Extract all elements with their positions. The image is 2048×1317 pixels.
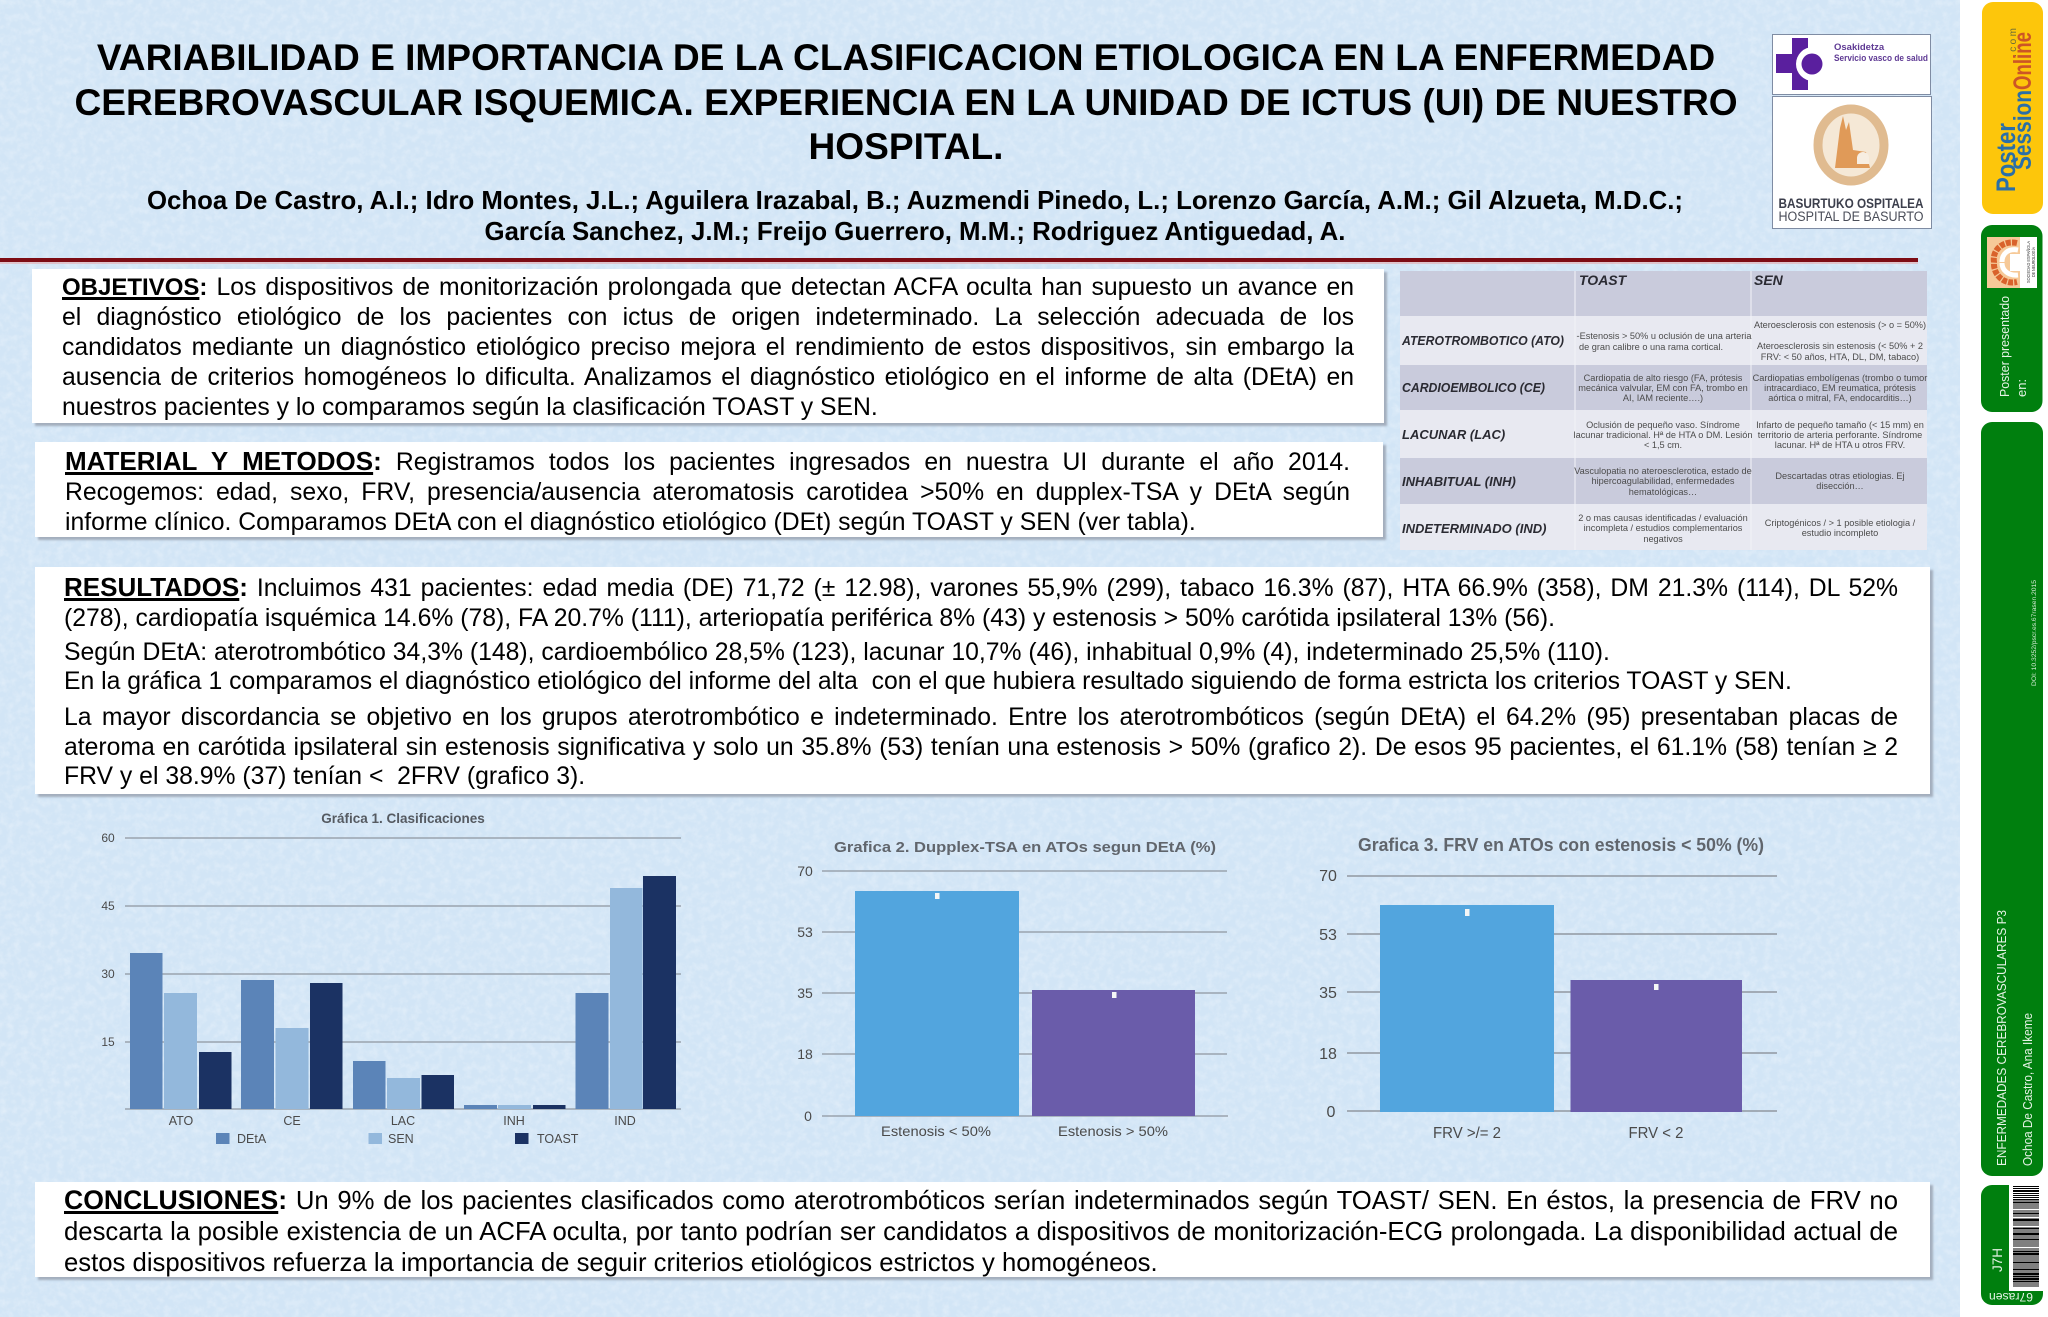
comparison table: TOAST and SEN: FRV: < 50 años, HTA, DL, DM, tabaco) xyxy=(1761,352,1919,362)
comparison table: TOAST and SEN: Cardiopatia de alto riesgo (FA, prótesis xyxy=(1584,373,1743,383)
title: HOSPITAL. xyxy=(808,125,1004,167)
logo: Osakidetza: Osakidetza xyxy=(1834,42,1885,53)
comparison table: TOAST and SEN: lacunar. Hª de HTA u otros FRV. xyxy=(1775,440,1905,450)
chart 1 legend xyxy=(216,1132,579,1146)
sidebar: session box: ENFERMEDADES CEREBROVASCULARES P3 xyxy=(1995,910,2009,1166)
comparison table: TOAST and SEN: intracardiaco, EM reumatica, prótesis xyxy=(1764,383,1916,393)
objetivos text: ausencia de criterios homogéneos lo dificulta. Analizamos el diagnóstico etiológico en el informe de alta (DEtA) en xyxy=(62,364,1354,391)
chart 3 title: Grafica 3. FRV en ATOs con estenosis < 50% (%) xyxy=(1358,834,1764,855)
chart 3: FRV: 35 xyxy=(1319,985,1337,1002)
comparison table: TOAST and SEN: INHABITUAL (INH) xyxy=(1402,474,1516,489)
comparison table: TOAST and SEN xyxy=(1400,271,1927,550)
chart 1 legend: TOAST xyxy=(537,1132,579,1146)
conclusiones text: estos dispositivos refuerza la importancia de seguir criterios etiológicos estrictos y homogéneos. xyxy=(64,1249,1158,1277)
sidebar: barcode box: J7H xyxy=(1990,1248,2005,1272)
comparison table: TOAST and SEN: incompleta / estudios complementarios xyxy=(1584,523,1743,533)
comparison table: TOAST and SEN: territorio de arteria perforante. Síndrome xyxy=(1758,430,1922,440)
resultados paragraph 3: La mayor discordancia se objetivo en los grupos aterotrombótico e indeterminado. Entre los aterotrombóticos (según DEtA) el 64.2% (95) presentaban placas de xyxy=(64,704,1898,731)
chart 1: clasificaciones: 60 xyxy=(101,831,115,845)
chart 2: duplex TSA: 53 xyxy=(797,924,813,940)
comparison table: TOAST and SEN: ATEROTROMBOTICO (ATO) xyxy=(1401,333,1564,348)
comparison table: TOAST and SEN: AI, IAM reciente….) xyxy=(1623,393,1703,403)
chart 2: duplex TSA: 18 xyxy=(797,1046,813,1062)
panel: resultados xyxy=(35,567,1930,794)
resultados paragraph 2: Según DEtA: aterotrombótico 34,3% (148), cardioembólico 28,5% (123), lacunar 10,7% (46), inhabitual 0,9% (4), indeterminado 25,5% (110). xyxy=(64,639,1610,666)
resultados paragraph 3: ateroma en carótida ipsilateral sin estenosis significativa y solo un 35.8% (53) tenían una estenosis > 50% (grafico 2). De esos 95 pacientes, el 61.1% (58) tenían ≥ 2 xyxy=(64,734,1898,760)
chart 1 legend: SEN xyxy=(388,1132,414,1146)
chart 3: FRV xyxy=(1319,834,1777,1142)
sidebar: congress box xyxy=(1981,225,2042,412)
chart 3: FRV: 0 xyxy=(1327,1104,1336,1121)
sidebar: session box: DOI: 10.3252/pscr.es.67rasen.2015 xyxy=(2031,580,2038,686)
chart 1: clasificaciones: 30 xyxy=(101,967,115,981)
objetivos text xyxy=(62,274,1354,421)
objetivos text: OBJETIVOS: Los dispositivos de monitorización prolongada que detectan ACFA oculta han supuesto un avance en xyxy=(62,274,1354,301)
resultados paragraph 1: (278), cardiopatía isquémica 14.6% (78), FA 20.7% (111), arteriopatía periférica 8% (43) y estenosis > 50% carótida ipsilateral 13% (56). xyxy=(64,605,1555,632)
material y metodos text xyxy=(65,446,1350,536)
comparison table: TOAST and SEN: Cardiopatias embolígenas (trombo o tumor xyxy=(1753,373,1927,383)
icon: neurology society logo: SOCIEDAD ESPAÑOLA xyxy=(2025,240,2031,283)
sidebar: Poster Session Online logo: Poster xyxy=(1991,123,2021,192)
sidebar: session box xyxy=(1981,422,2043,1176)
chart 1: clasificaciones: ATO xyxy=(169,1114,194,1128)
chart 1: clasificaciones: IND xyxy=(614,1114,636,1128)
sidebar: congress box: en: xyxy=(2014,379,2029,397)
comparison table: TOAST and SEN: -Estenosis > 50% u oclusión de una arteria xyxy=(1577,331,1752,341)
comparison table: TOAST and SEN: SEN xyxy=(1754,272,1784,288)
chart 3: FRV: 18 xyxy=(1319,1046,1337,1063)
sidebar: barcode box: 67rasen xyxy=(1989,1290,2033,1302)
comparison table: TOAST and SEN: Ateroesclerosis sin estenosis (< 50% + 2 xyxy=(1757,341,1923,351)
panel: conclusiones xyxy=(35,1182,1930,1277)
chart 1: clasificaciones: CE xyxy=(283,1114,301,1128)
comparison table: TOAST and SEN: INDETERMINADO (IND) xyxy=(1402,521,1546,536)
comparison table: TOAST and SEN: CARDIOEMBOLICO (CE) xyxy=(1402,380,1545,395)
sidebar: Poster Session Online logo xyxy=(1982,2,2043,214)
logo: Osakidetza: Servicio vasco de salud xyxy=(1834,53,1928,63)
comparison table: TOAST and SEN: Oclusión de pequeño vaso. Síndrome xyxy=(1586,420,1740,430)
objetivos text: nuestros pacientes y lo comparamos según la clasificación TOAST y SEN. xyxy=(62,394,878,421)
chart 3: FRV: 53 xyxy=(1319,927,1337,944)
comparison table: TOAST and SEN: hipercoagulabilidad, enfermedades xyxy=(1591,476,1735,486)
chart 2: duplex TSA: 35 xyxy=(797,985,813,1001)
icon: neurology society logo xyxy=(1987,237,2037,288)
sidebar: session box: Ochoa De Castro, Ana Ikeme xyxy=(2021,1013,2035,1166)
comparison table: TOAST and SEN: disección… xyxy=(1816,481,1864,491)
resultados paragraph 1: RESULTADOS: Incluimos 431 pacientes: edad media (DE) 71,72 (± 12.98), varones 55,9% (299), tabaco 16.3% (87), HTA 66.9% (358), DM 21.3% (114), DL 52% xyxy=(64,572,1898,602)
chart 1: clasificaciones: LAC xyxy=(391,1114,415,1128)
comparison table: TOAST and SEN: hematológicas… xyxy=(1629,487,1697,497)
comparison table: TOAST and SEN: Infarto de pequeño tamaño (< 15 mm) en xyxy=(1756,420,1924,430)
authors xyxy=(147,187,1683,246)
chart 1: clasificaciones: 15 xyxy=(101,1035,115,1049)
panel: material y metodos xyxy=(35,442,1383,537)
material y metodos text: informe clínico. Comparamos DEtA con el diagnóstico etiológico (DEt) según TOAST y SEN (ver tabla). xyxy=(65,509,1196,536)
sidebar: Poster Session Online logo: Session xyxy=(2009,90,2037,170)
sidebar: Poster Session Online logo: .com xyxy=(2008,28,2019,57)
comparison table: TOAST and SEN: LACUNAR (LAC) xyxy=(1402,427,1505,442)
title: CEREBROVASCULAR ISQUEMICA. EXPERIENCIA EN LA UNIDAD DE ICTUS (UI) DE NUESTRO xyxy=(74,81,1738,123)
comparison table: TOAST and SEN: TOAST xyxy=(1579,272,1628,288)
chart 2: duplex TSA: Estenosis > 50% xyxy=(1058,1123,1168,1139)
resultados paragraph 2: En la gráfica 1 comparamos el diagnóstico etiológico del informe del alta con el que hubiera resultado siguiendo de forma estricta los criterios TOAST y SEN. xyxy=(64,668,1792,695)
resultados paragraph 2 xyxy=(64,639,1792,695)
chart 2: duplex TSA: 0 xyxy=(804,1108,812,1124)
conclusiones text: descarta la posible existencia de un ACFA oculta, por tanto podrían ser candidatos a dispositivos de monitorización-ECG prolongada. La disponibilidad actual de xyxy=(64,1218,1898,1246)
conclusiones text xyxy=(64,1185,1898,1277)
chart 3: FRV: FRV >/= 2 xyxy=(1433,1125,1501,1142)
chart 1 legend: DEtA xyxy=(237,1132,267,1146)
resultados paragraph 3: FRV y el 38.9% (37) tenían < 2FRV (grafico 3). xyxy=(64,763,585,790)
title: VARIABILIDAD E IMPORTANCIA DE LA CLASIFICACION ETIOLOGICA EN LA ENFERMEDAD xyxy=(97,36,1715,78)
resultados paragraph 3 xyxy=(64,704,1898,790)
comparison table: TOAST and SEN: mecánica valvular, EM con FA, trombo en xyxy=(1578,383,1748,393)
comparison table: TOAST and SEN: 2 o mas causas identificadas / evaluación xyxy=(1578,513,1748,523)
comparison table: TOAST and SEN: Vasculopatia no ateroesclerotica, estado de xyxy=(1574,466,1752,476)
comparison table: TOAST and SEN: estudio incompleto xyxy=(1802,528,1878,538)
material y metodos text: MATERIAL Y METODOS: Registramos todos los pacientes ingresados en nuestra UI durante el año 2014. xyxy=(65,446,1350,476)
logo: Hospital de Basurto xyxy=(1772,96,1932,228)
sidebar: congress box: Poster presentado xyxy=(1997,296,2012,397)
conclusiones text: CONCLUSIONES: Un 9% de los pacientes clasificados como aterotrombóticos serían indeterminados según TOAST/ SEN. En éstos, la presencia de FRV no xyxy=(64,1185,1898,1215)
objetivos text: el diagnóstico etiológico de los pacientes con ictus de origen indeterminado. La selección adecuada de los xyxy=(62,304,1354,331)
comparison table: TOAST and SEN: Ateroesclerosis con estenosis (> o = 50%) xyxy=(1754,320,1926,330)
authors: García Sanchez, J.M.; Freijo Guerrero, M.M.; Rodriguez Antiguedad, A. xyxy=(484,218,1345,246)
comparison table: TOAST and SEN: aórtica o mitral, FA, endocarditis…) xyxy=(1768,393,1912,403)
sidebar: barcode box xyxy=(1981,1185,2043,1305)
comparison table: TOAST and SEN: Criptogénicos / > 1 posible etiologia / xyxy=(1765,518,1916,528)
chart 1: clasificaciones: 45 xyxy=(101,899,115,913)
chart 2: duplex TSA: 70 xyxy=(797,863,813,879)
chart 3: FRV: FRV < 2 xyxy=(1628,1125,1684,1142)
chart 2: duplex TSA xyxy=(797,839,1228,1139)
chart 1: clasificaciones xyxy=(101,811,681,1146)
comparison table: TOAST and SEN: negativos xyxy=(1643,534,1683,544)
sidebar: Poster Session Online logo: Online xyxy=(2009,32,2037,90)
logo: Hospital de Basurto: HOSPITAL DE BASURTO xyxy=(1778,209,1924,224)
chart 2: duplex TSA: Estenosis < 50% xyxy=(881,1123,991,1139)
logo: Hospital de Basurto: BASURTUKO OSPITALEA xyxy=(1778,196,1924,211)
authors: Ochoa De Castro, A.I.; Idro Montes, J.L.; Aguilera Irazabal, B.; Auzmendi Pinedo, L.; Lorenzo García, A.M.; Gil Alzueta, M.D.C.; xyxy=(147,187,1683,215)
title xyxy=(74,36,1738,167)
comparison table: TOAST and SEN: de gran calibre o una rama cortical. xyxy=(1579,342,1723,352)
material y metodos text: Recogemos: edad, sexo, FRV, presencia/ausencia ateromatosis carotidea >50% en dupplex-TSA y DEtA según xyxy=(65,479,1350,506)
chart 1 title: Gráfica 1. Clasificaciones xyxy=(321,811,485,826)
logo: Osakidetza xyxy=(1772,34,1930,94)
chart 3: FRV: 70 xyxy=(1319,868,1337,885)
icon: neurology society logo: DE NEUROLOGÍA xyxy=(2030,246,2036,277)
chart 2 title: Grafica 2. Dupplex-TSA en ATOs segun DEtA (%) xyxy=(834,839,1216,856)
comparison table: TOAST and SEN: Descartadas otras etiologias. Ej xyxy=(1775,471,1905,481)
resultados paragraph 1 xyxy=(64,572,1898,632)
chart 1: clasificaciones: INH xyxy=(503,1114,525,1128)
panel: objetivos xyxy=(32,269,1384,423)
objetivos text: candidatos mediante un diagnóstico etiológico preciso mejora el rendimiento de estos dispositivos, sin embargo la xyxy=(62,334,1354,361)
comparison table: TOAST and SEN: < 1,5 cm. xyxy=(1644,440,1682,450)
comparison table: TOAST and SEN: lacunar tradicional. Hª de HTA o DM. Lesión xyxy=(1574,430,1752,440)
